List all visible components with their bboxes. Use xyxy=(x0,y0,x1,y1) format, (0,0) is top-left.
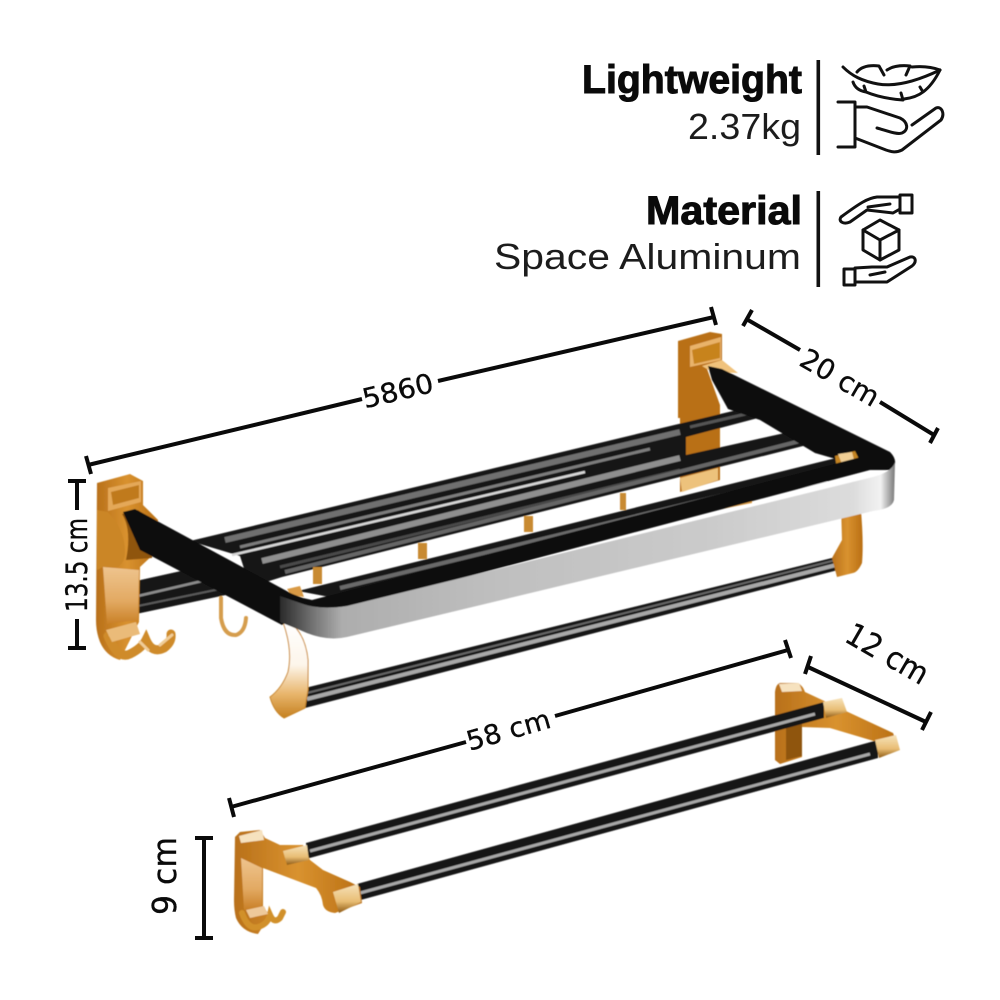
dimension: 13.5 cm height: 13.5 cm xyxy=(60,518,94,612)
caps: right gold collars xyxy=(823,698,900,758)
bracket: left gold with hooks xyxy=(96,474,172,660)
highlight: white gap above rim xyxy=(340,481,827,600)
feature: lightweight xyxy=(582,58,943,155)
dimension: 12 cm depth: 12 cm xyxy=(839,616,935,692)
bracket: far right gold xyxy=(775,683,898,764)
bracket: near left gold with hook xyxy=(234,830,362,934)
dimension: 5860 width: 5860 xyxy=(359,368,437,415)
rail: right black side xyxy=(708,366,895,466)
gold bits: small brackets seen through rods xyxy=(287,497,752,597)
dimension: 20 cm depth xyxy=(743,310,938,443)
pegs: gold supports xyxy=(313,493,626,584)
rods: left rear towel bar xyxy=(136,569,240,614)
dimension: 9 cm height: 9 cm xyxy=(145,837,184,915)
dimension: 58 cm width xyxy=(229,640,791,817)
feature: material xyxy=(494,189,915,287)
icon: feather over hand xyxy=(838,66,943,152)
hook: small gold xyxy=(221,598,246,635)
dimension: 58 cm width: 58 cm xyxy=(463,704,554,758)
dimension: 12 cm depth xyxy=(805,616,935,730)
rods: back and middle tubes xyxy=(190,405,807,587)
dimension: 9 cm height xyxy=(145,837,213,938)
dimension: 5860 width xyxy=(86,307,716,474)
bracket: back right gold xyxy=(678,332,738,492)
rail: left black side xyxy=(123,509,307,625)
main rack illustration xyxy=(96,332,895,718)
clip: gold on front tube right xyxy=(835,451,863,478)
divider bar xyxy=(816,60,820,155)
lower double-bar rack illustration xyxy=(234,683,900,934)
rods: twin black bars xyxy=(306,702,878,901)
rods: front tubes xyxy=(298,458,836,599)
dimension: 20 cm depth: 20 cm xyxy=(794,342,885,414)
divider bar xyxy=(816,191,820,287)
bracket: front left flared leg xyxy=(270,622,308,718)
rod: lower towel bar xyxy=(305,556,840,708)
value: Space Aluminum: Space Aluminum xyxy=(494,236,801,277)
heading: Lightweight: Lightweight xyxy=(582,58,802,102)
value: 2.37kg: 2.37kg xyxy=(688,106,801,147)
heading: Material: Material xyxy=(646,189,802,233)
bracket: front right leg xyxy=(832,500,863,577)
rail: front face xyxy=(280,452,895,638)
icon: hands around cube xyxy=(840,195,915,285)
